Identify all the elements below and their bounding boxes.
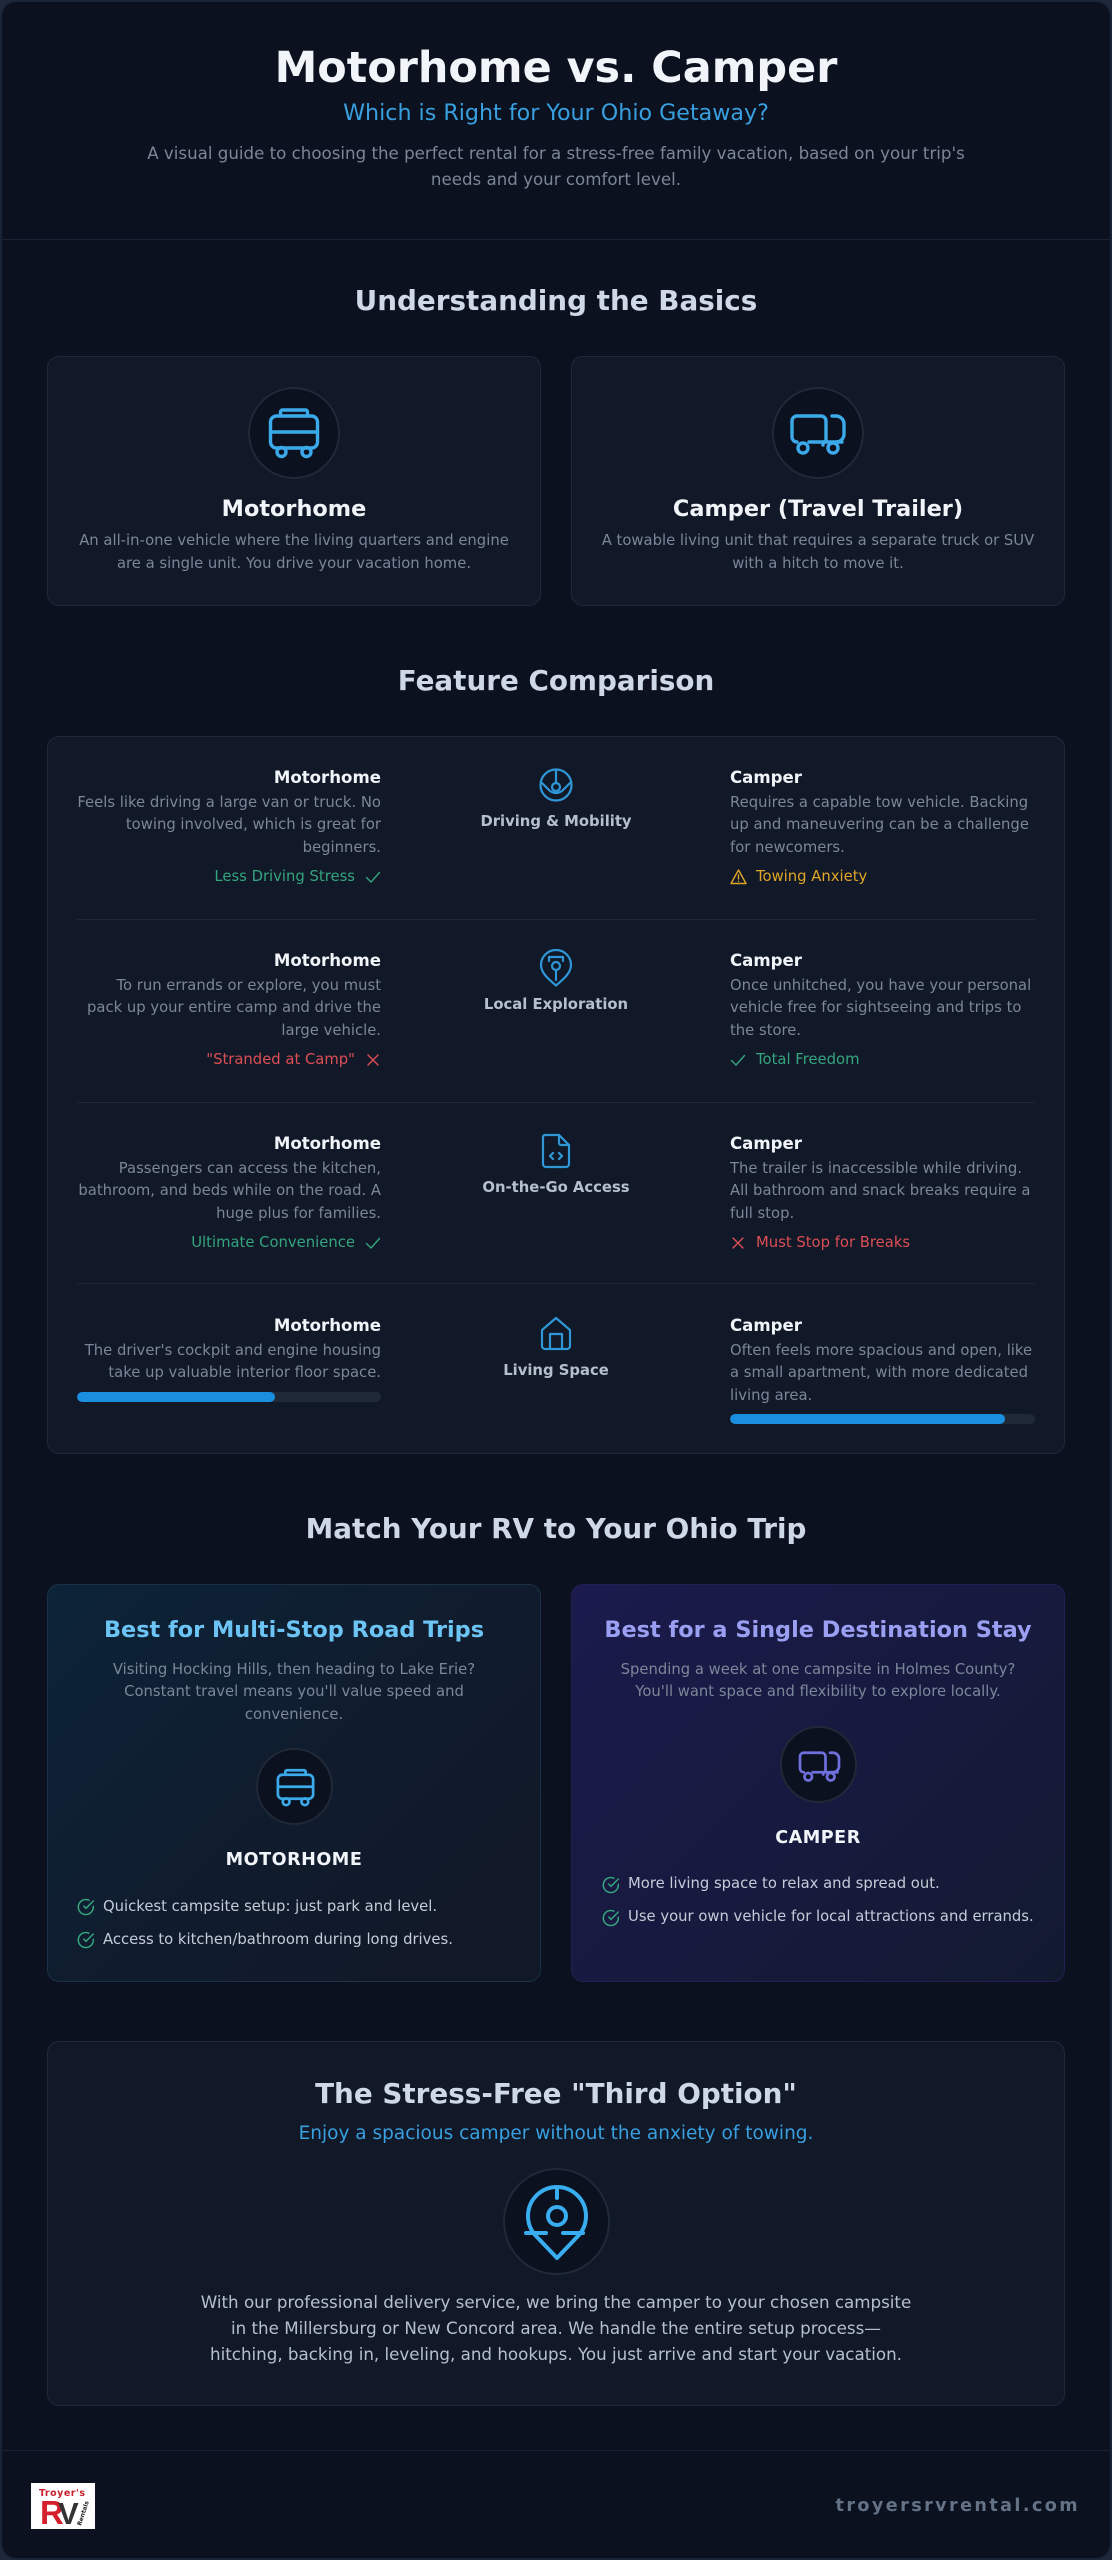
panel description: You'll want space and flexibility to explore locally. <box>635 1683 1001 1700</box>
panel body text: in the Millersburg or New Concord area. We handle the entire setup process— <box>231 2318 881 2338</box>
motorhome space bar <box>77 1392 381 1402</box>
footer <box>0 2450 1112 2560</box>
benefit list: More living space to relax and spread out. <box>628 1875 940 1892</box>
motorhome side: The driver's cockpit and engine housing <box>85 1342 381 1359</box>
camper side: Camper <box>730 1316 802 1335</box>
motorhome side: Motorhome <box>274 951 381 970</box>
benefit list: Quickest campsite setup: just park and level. <box>103 1898 437 1915</box>
panel: single destination stay <box>571 1584 1065 1982</box>
panel title: Best for Multi-Stop Road Trips <box>104 1617 484 1643</box>
intro text: needs and your comfort level. <box>431 170 681 189</box>
icon: file with code <box>542 1134 570 1168</box>
camper side <box>730 951 1031 1068</box>
intro text: A visual guide to choosing the perfect rental for a stress-free family vacation, based on your trip's <box>147 144 965 163</box>
motorhome side <box>78 1134 381 1251</box>
benefit list: Use your own vehicle for local attractions and errands. <box>628 1908 1034 1925</box>
motorhome side: huge plus for families. <box>216 1205 381 1222</box>
motorhome side: towing involved, which is great for <box>126 816 381 833</box>
camper side: Towing Anxiety <box>756 868 867 885</box>
camper side: for newcomers. <box>730 839 845 856</box>
camper side <box>730 1134 1030 1251</box>
panel: multi-stop road trips <box>47 1584 541 1982</box>
icon: motorhome <box>256 1748 333 1825</box>
camper side: vehicle free for sightseeing and trips to <box>730 999 1021 1016</box>
logo <box>31 2483 95 2529</box>
icon: motorhome <box>248 387 340 479</box>
camper description: with a hitch to move it. <box>732 555 904 572</box>
camper side: living area. <box>730 1387 812 1404</box>
motorhome description <box>79 532 509 572</box>
website: troyersrvrental.com <box>836 2496 1080 2516</box>
motorhome side: Passengers can access the kitchen, <box>119 1160 381 1177</box>
motorhome side: beginners. <box>303 839 381 856</box>
icon: camper <box>772 387 864 479</box>
camper side: The trailer is inaccessible while driving. <box>730 1160 1022 1177</box>
panel body text: hitching, backing in, leveling, and hookups. You just arrive and start your vacation. <box>210 2344 902 2364</box>
motorhome side: large vehicle. <box>281 1022 381 1039</box>
motorhome side: "Stranded at Camp" <box>206 1051 355 1068</box>
panel body text <box>201 2292 911 2364</box>
motorhome side <box>77 1316 381 1402</box>
logo: R <box>40 2494 64 2531</box>
motorhome side <box>87 951 381 1068</box>
camper side: Camper <box>730 951 802 970</box>
heading: match your rv: Match Your RV to Your Ohio Trip <box>306 1512 806 1545</box>
camper description: A towable living unit that requires a separate truck or SUV <box>602 532 1034 549</box>
panel title: The Stress-Free "Third Option" <box>315 2077 797 2110</box>
motorhome description: An all-in-one vehicle where the living quarters and engine <box>79 532 509 549</box>
row: local exploration <box>77 950 1035 1103</box>
camper side <box>730 1316 1035 1424</box>
motorhome side: Ultimate Convenience <box>191 1234 355 1251</box>
benefit list <box>78 1898 453 1948</box>
heading: understanding the basics: Understanding the Basics <box>355 284 757 317</box>
camper side: the store. <box>730 1022 801 1039</box>
row: living space <box>77 1316 1035 1424</box>
row: on-the-go access <box>77 1133 1035 1284</box>
row: driving and mobility <box>77 767 1035 920</box>
panel: camper basics <box>571 356 1065 606</box>
panel: motorhome basics <box>47 356 541 606</box>
camper side: Camper <box>730 1134 802 1153</box>
motorhome side: pack up your entire camp and drive the <box>87 999 381 1016</box>
panel description: Visiting Hocking Hills, then heading to Lake Erie? <box>113 1661 475 1678</box>
panel: third option <box>47 2041 1065 2406</box>
feature label: Driving & Mobility <box>480 813 632 830</box>
camper side: up and maneuvering can be a challenge <box>730 816 1029 833</box>
icon: delivery pin <box>503 2168 610 2275</box>
panel: feature comparison <box>47 736 1065 1454</box>
title: Motorhome vs. Camper <box>275 43 837 93</box>
vehicle name: MOTORHOME <box>226 1850 362 1870</box>
camper title: Camper (Travel Trailer) <box>673 496 963 522</box>
camper side <box>730 768 1029 885</box>
benefit list: Access to kitchen/bathroom during long drives. <box>103 1931 453 1948</box>
camper side: Must Stop for Breaks <box>756 1234 910 1251</box>
feature label: Local Exploration <box>484 996 628 1013</box>
motorhome description: are a single unit. You drive your vacation home. <box>117 555 471 572</box>
motorhome side: Feels like driving a large van or truck. No <box>77 794 381 811</box>
logo: V <box>58 2496 79 2531</box>
camper side: Camper <box>730 768 802 787</box>
panel description: convenience. <box>245 1706 343 1723</box>
icon: house <box>540 1316 572 1350</box>
intro text <box>147 144 965 189</box>
heading: feature comparison: Feature Comparison <box>398 664 714 697</box>
panel body text: With our professional delivery service, we bring the camper to your chosen campsite <box>201 2292 911 2312</box>
camper space bar <box>730 1414 1035 1424</box>
motorhome side: Motorhome <box>274 768 381 787</box>
camper side: Total Freedom <box>756 1051 860 1068</box>
camper side: full stop. <box>730 1205 794 1222</box>
motorhome side: Less Driving Stress <box>214 868 355 885</box>
camper description <box>602 532 1034 572</box>
icon: map pin <box>540 948 572 987</box>
panel description: Spending a week at one campsite in Holmes County? <box>621 1661 1015 1678</box>
motorhome side: Motorhome <box>274 1316 381 1335</box>
motorhome side: Motorhome <box>274 1134 381 1153</box>
motorhome side: take up valuable interior floor space. <box>108 1364 381 1381</box>
motorhome side: bathroom, and beds while on the road. A <box>78 1182 381 1199</box>
subtitle: Which is Right for Your Ohio Getaway? <box>343 100 769 126</box>
panel subtitle: Enjoy a spacious camper without the anxiety of towing. <box>299 2123 813 2144</box>
camper side: Once unhitched, you have your personal <box>730 977 1031 994</box>
icon: camper <box>780 1726 857 1803</box>
motorhome side <box>77 768 381 885</box>
header <box>0 0 1112 240</box>
camper side: Often feels more spacious and open, like <box>730 1342 1032 1359</box>
panel title: Best for a Single Destination Stay <box>604 1617 1032 1643</box>
panel description <box>113 1661 475 1723</box>
feature label: Living Space <box>503 1362 609 1379</box>
logo: Rentals <box>76 2500 91 2527</box>
motorhome title: Motorhome <box>222 496 366 522</box>
motorhome side: To run errands or explore, you must <box>116 977 381 994</box>
camper side: Requires a capable tow vehicle. Backing <box>730 794 1028 811</box>
logo: Troyer's <box>39 2488 85 2499</box>
feature label: On-the-Go Access <box>482 1179 630 1196</box>
camper side: All bathroom and snack breaks require a <box>730 1182 1030 1199</box>
benefit list <box>602 1875 1034 1926</box>
panel description <box>621 1661 1015 1700</box>
camper side: a small apartment, with more dedicated <box>730 1364 1028 1381</box>
vehicle name: CAMPER <box>775 1828 861 1848</box>
icon: steering wheel <box>539 768 573 802</box>
panel description: Constant travel means you'll value speed and <box>124 1683 464 1700</box>
